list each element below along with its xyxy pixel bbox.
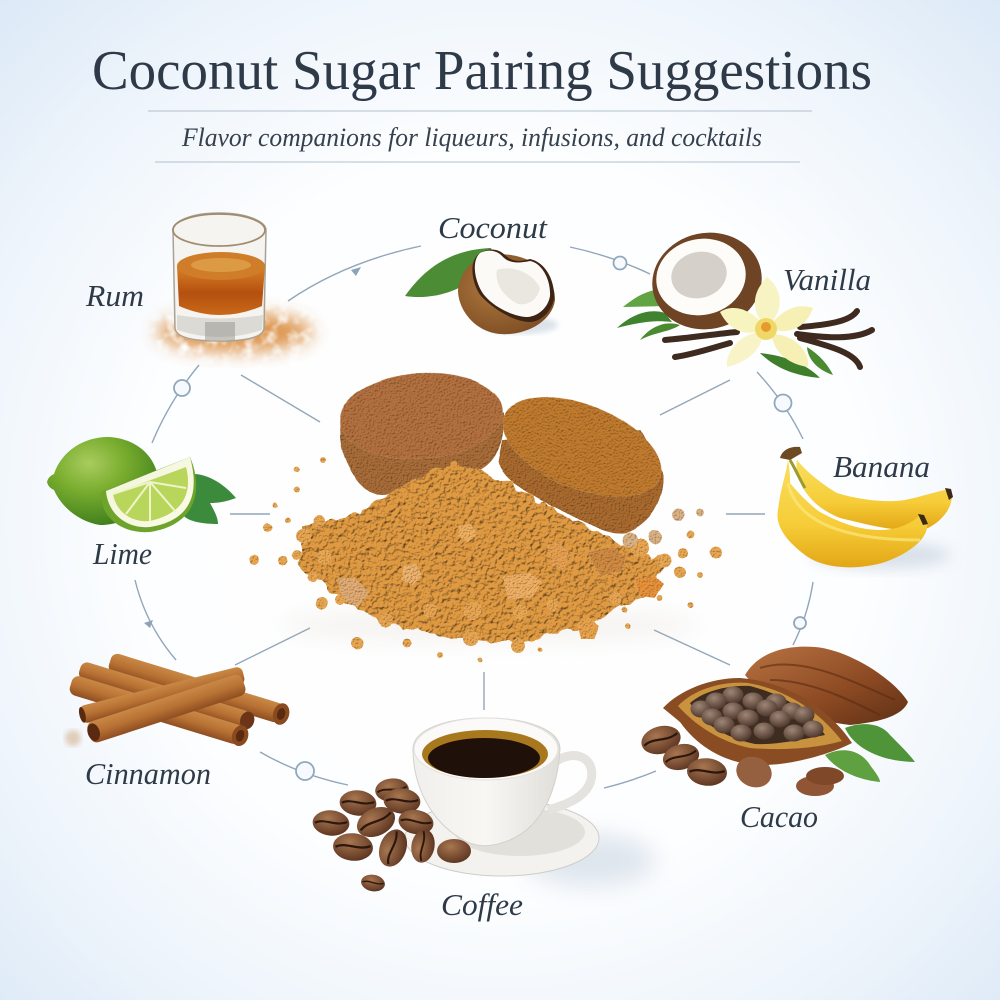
label: lime: Lime <box>92 536 152 571</box>
spice dust <box>157 312 313 352</box>
item: coffee <box>312 718 655 893</box>
sugar chunks <box>249 457 722 662</box>
whole pod <box>745 647 908 725</box>
leaves <box>623 290 668 307</box>
coffee <box>422 730 548 778</box>
leaves <box>845 724 915 762</box>
pods <box>665 311 872 367</box>
top banana <box>796 460 952 530</box>
label: banana: Banana <box>833 449 930 484</box>
item: banana <box>777 447 953 569</box>
sugar pile <box>300 462 667 643</box>
label: coconut: Coconut <box>438 210 548 245</box>
label: vanilla: Vanilla <box>783 262 871 297</box>
saucer <box>405 800 599 876</box>
wedge <box>101 457 196 532</box>
sugar disc left <box>336 367 506 495</box>
shell <box>458 254 555 334</box>
central sugar <box>249 367 722 662</box>
item: rum <box>157 213 313 352</box>
connector ring <box>135 246 813 788</box>
half coconut <box>643 223 771 339</box>
sticks <box>107 651 292 727</box>
item: cinnamon <box>65 651 292 748</box>
stem <box>780 447 802 460</box>
glass <box>173 213 266 341</box>
cup <box>413 718 560 846</box>
bottom banana <box>777 460 927 567</box>
label: cacao: Cacao <box>740 799 818 834</box>
item: lime <box>47 437 236 532</box>
sugar disc right <box>488 377 676 533</box>
handle <box>548 756 592 810</box>
label: cinnamon: Cinnamon <box>85 756 211 791</box>
loose beans <box>638 722 844 796</box>
item: vanilla coconut <box>617 223 872 378</box>
open pod <box>663 678 852 765</box>
seeds <box>690 686 824 742</box>
leaf <box>405 248 492 297</box>
title: Coconut Sugar Pairing Suggestions <box>92 40 872 102</box>
label: coffee: Coffee <box>441 887 523 922</box>
item: coconut <box>405 248 558 334</box>
flower <box>720 277 813 367</box>
mint <box>183 474 236 524</box>
subtitle: Flavor companions for liqueurs, infusions, and cocktails <box>181 123 762 152</box>
item: cacao <box>638 647 915 796</box>
beans <box>312 777 471 893</box>
whole lime <box>47 437 158 525</box>
label: rum: Rum <box>85 278 144 313</box>
